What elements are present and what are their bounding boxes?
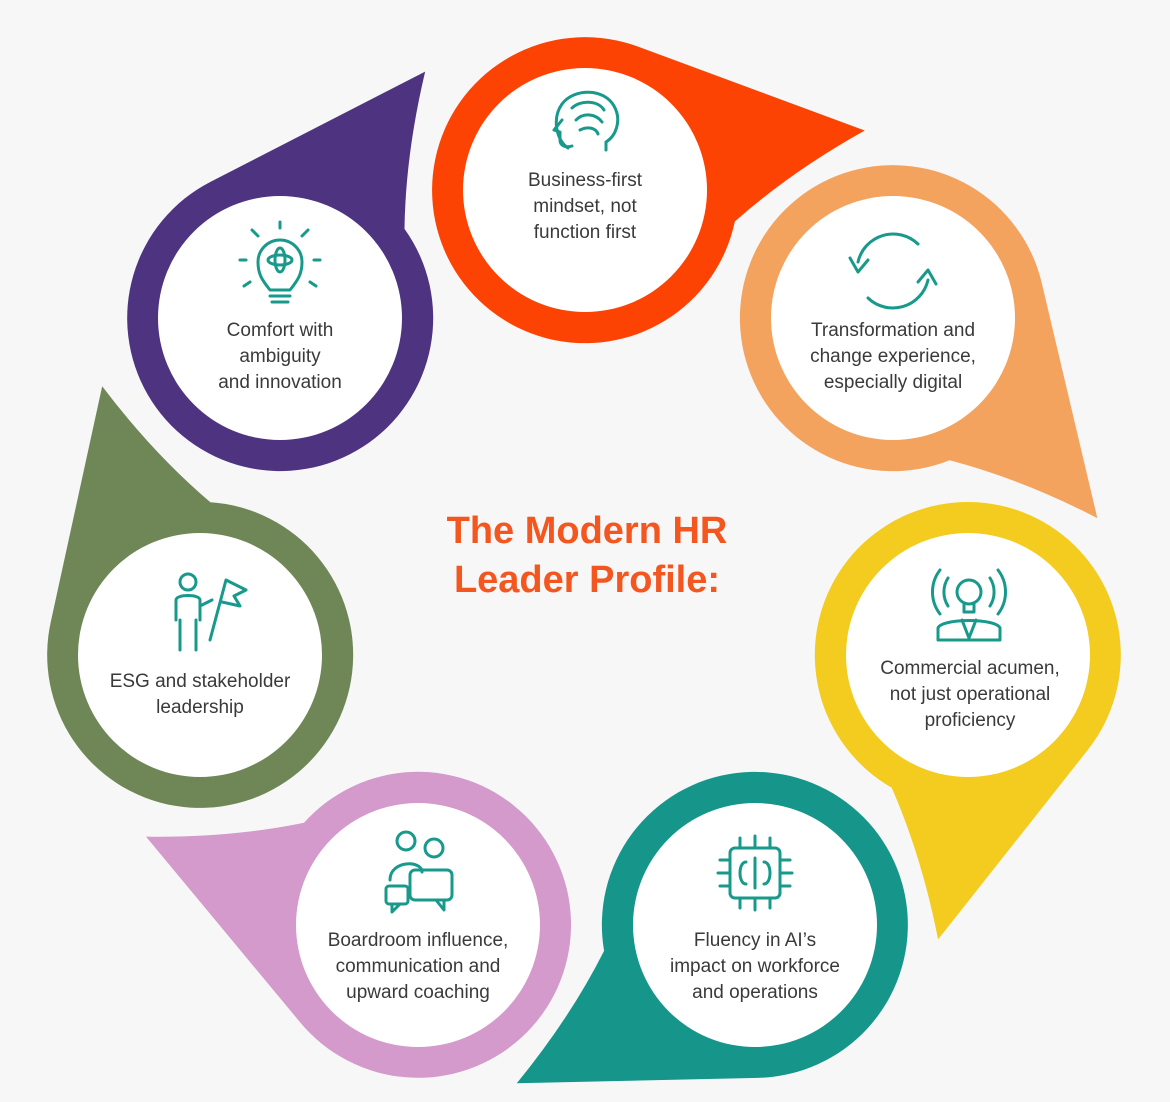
title: The Modern HR [447,510,727,552]
text: transformation: change experience, [810,346,976,367]
drop: business-first mindset [404,0,897,372]
drop: commercial acumen [786,487,1136,955]
text: transformation: Transformation and [811,320,975,341]
drop: ESG [0,334,396,851]
text: boardroom: communication and [336,956,500,977]
text: AI: impact on workforce [670,956,840,977]
drop: ambiguity [71,0,557,528]
drop: transformation [677,102,1170,628]
text: ESG: ESG and stakeholder [110,671,291,692]
text: ambiguity: ambiguity [239,346,321,367]
text: business-first: mindset, not [533,196,637,217]
text: ambiguity: and innovation [218,372,342,393]
text: business-first: function first [534,222,637,243]
icon: cycle arrows [850,234,936,308]
text: AI: Fluency in AI’s [694,930,816,951]
text: ambiguity: Comfort with [227,320,333,341]
text: boardroom: Boardroom influence, [328,930,508,951]
icon: light bulb with atom [240,222,320,302]
drop: boardroom [99,691,611,1102]
icon: person with bulb signal [932,570,1006,640]
text: commercial: proficiency [925,710,1016,731]
text: ESG: leadership [156,697,244,718]
text: transformation: especially digital [824,372,962,393]
text: business-first: Business-first [528,170,643,191]
text: boardroom: upward coaching [346,982,490,1003]
icon: person with flag [176,574,246,650]
title: Leader Profile: [454,559,720,601]
icon: people with chat [386,832,452,912]
drop: AI fluency [432,713,967,1102]
text: commercial: Commercial acumen, [880,658,1060,679]
icon: head with brain [554,92,618,150]
text: AI: and operations [692,982,818,1003]
icon: AI chip [718,836,792,910]
text: commercial: not just operational [890,684,1050,705]
